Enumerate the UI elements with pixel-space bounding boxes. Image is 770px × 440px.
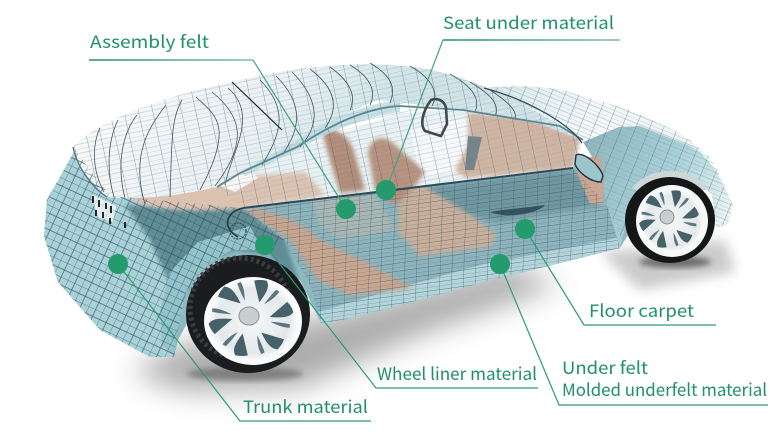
front seat cushion bbox=[398, 185, 497, 256]
door handle recess bbox=[490, 205, 545, 215]
ground shadow bbox=[130, 240, 735, 392]
rear deck white reflections bbox=[150, 170, 258, 195]
label: Seat under material: Seat under material bbox=[443, 9, 614, 34]
door pillar brown bbox=[577, 155, 604, 204]
fender bbox=[583, 118, 733, 248]
rear deck brown bbox=[130, 172, 325, 210]
wing mirror bbox=[575, 154, 603, 182]
rear dark cavity bbox=[125, 205, 300, 290]
rear seat backrest right bbox=[368, 138, 425, 205]
upper door dark band bbox=[400, 170, 600, 222]
mesh: hood and fender bbox=[483, 86, 733, 240]
roof surface bbox=[73, 64, 583, 198]
mesh: door and floor bbox=[243, 168, 620, 325]
car illustration bbox=[44, 63, 733, 357]
label: Floor carpet: Floor carpet bbox=[589, 297, 695, 322]
dashboard brown bbox=[455, 113, 580, 178]
rear seat cushion bbox=[310, 195, 395, 240]
rear seat backrest left bbox=[322, 130, 365, 193]
belt and roof contour lines bbox=[73, 88, 583, 237]
roof teal reflection band bbox=[240, 100, 400, 176]
mesh: rear bbox=[44, 150, 285, 357]
label: Under felt and Molded underfelt material: Under felt bbox=[562, 354, 649, 379]
rear vent slits bbox=[93, 196, 125, 228]
door panel bbox=[243, 168, 620, 325]
rear vent light bbox=[91, 194, 116, 222]
marker dots bbox=[108, 180, 535, 274]
leader lines bbox=[89, 40, 768, 421]
mesh: roof bbox=[73, 64, 583, 208]
steering wheel bbox=[422, 99, 447, 136]
sill highlight bbox=[318, 238, 620, 325]
roof section curves bbox=[94, 63, 516, 204]
label: Trunk material: Trunk material bbox=[243, 393, 368, 418]
hood surface bbox=[483, 86, 713, 160]
rear quarter panel bbox=[44, 150, 205, 357]
rear glass and cabin white bbox=[217, 110, 580, 208]
label: Wheel liner material: Wheel liner material bbox=[377, 360, 537, 385]
front wheel bbox=[625, 171, 715, 263]
label: Under felt and Molded underfelt material bbox=[562, 354, 767, 401]
fuel cap ring bbox=[230, 223, 246, 239]
rear fender band bbox=[160, 226, 262, 356]
label: Assembly felt: Assembly felt bbox=[90, 28, 210, 53]
interior floor brown bbox=[243, 208, 413, 295]
car body lower bbox=[44, 150, 650, 357]
center console vents bbox=[465, 136, 482, 170]
front window light bbox=[410, 118, 470, 176]
label: Under felt and Molded underfelt material: Molded underfelt material bbox=[562, 376, 767, 401]
rear wheel bbox=[186, 255, 310, 373]
